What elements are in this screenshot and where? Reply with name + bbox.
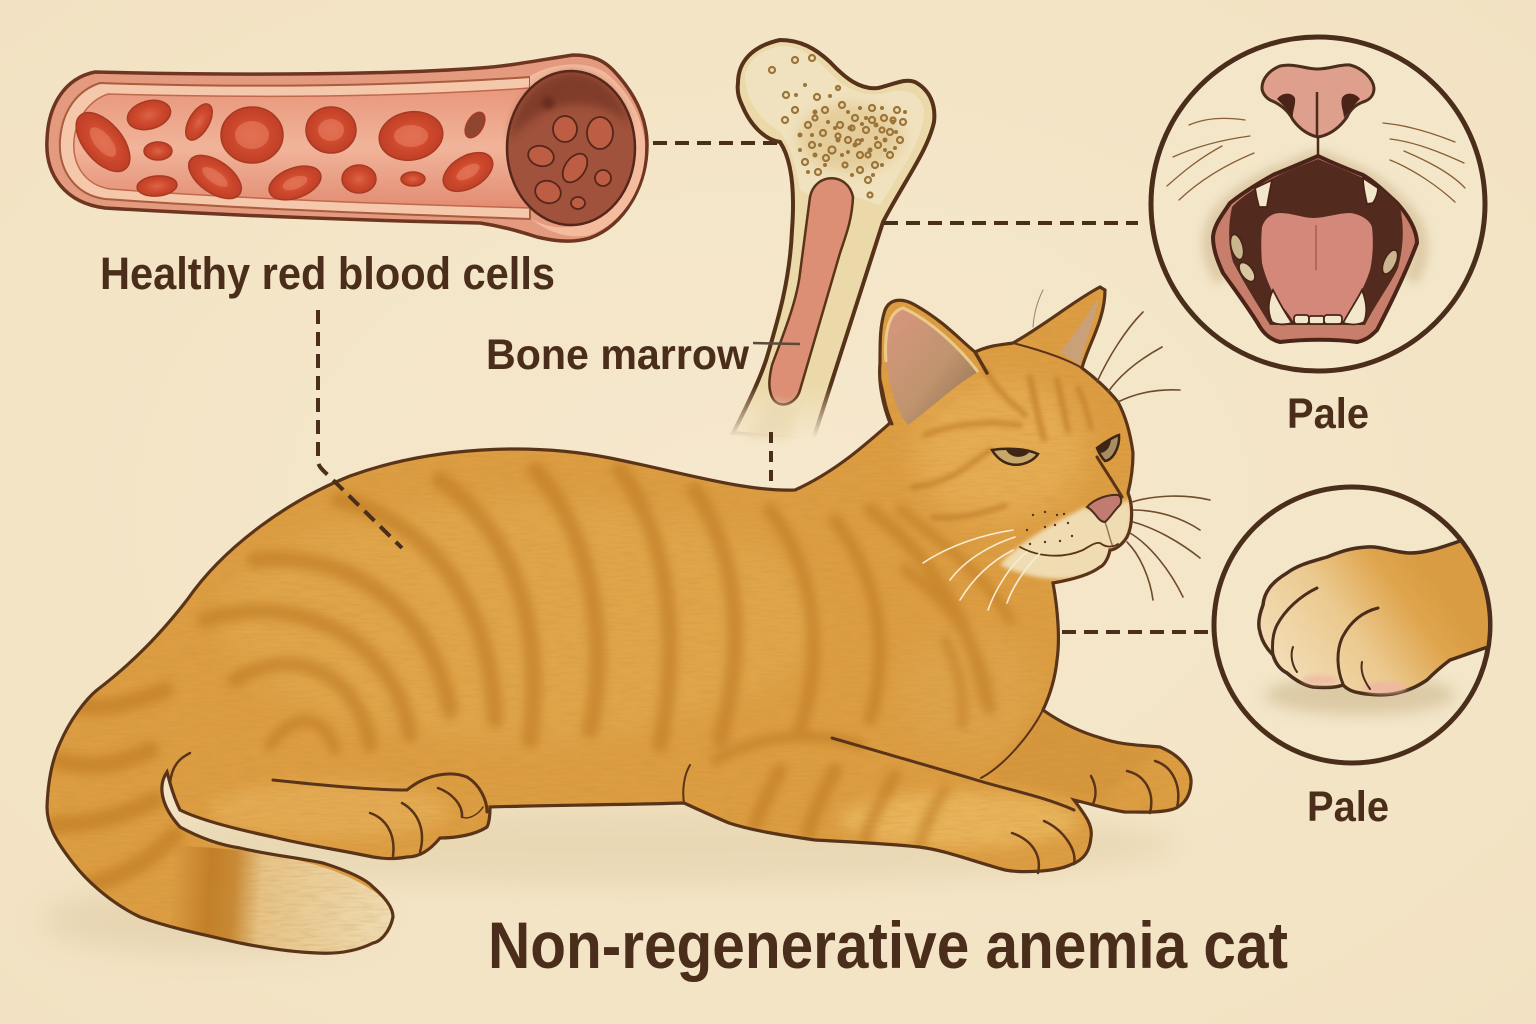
inset: paw circle — [1214, 487, 1500, 763]
cat outline — [47, 287, 1191, 953]
head markings — [913, 370, 1091, 518]
stripes — [55, 470, 1010, 885]
fur shading — [1210, 156, 1318, 280]
cat body — [30, 280, 1210, 970]
cat inner contour lines — [170, 343, 1178, 873]
label: pale mouth: Pale — [1287, 390, 1369, 438]
paw shadow — [1265, 675, 1455, 715]
label: pale paw: Pale — [1307, 783, 1389, 831]
paw — [1259, 530, 1500, 695]
toe lines — [1272, 588, 1378, 689]
lower left canine — [1269, 290, 1292, 324]
label: healthy red blood cells: Healthy red blood cells — [100, 248, 555, 299]
teeth — [1228, 178, 1401, 324]
leader: bone marrow — [753, 343, 800, 344]
upper left canine — [1255, 180, 1272, 207]
bone marrow — [769, 178, 853, 404]
cat whiskers — [923, 290, 1210, 610]
open mouth — [1213, 156, 1417, 342]
illustration: blood vessel with red blood cells — [47, 55, 647, 241]
incisors — [1294, 315, 1309, 324]
whisker dots — [1026, 511, 1073, 545]
fur lines — [1167, 118, 1465, 202]
connector: bone to mouth — [884, 221, 1138, 225]
cat nose — [1087, 495, 1121, 522]
cat eyes — [992, 435, 1119, 465]
red blood cells — [66, 96, 499, 207]
far front leg shading — [985, 710, 1160, 800]
nose — [1262, 65, 1374, 137]
face lines — [1097, 457, 1122, 497]
upper right canine — [1363, 178, 1378, 204]
muzzle — [1000, 500, 1132, 579]
lower right canine — [1343, 290, 1366, 324]
side teeth — [1229, 234, 1244, 260]
tail tip — [170, 845, 395, 956]
connector: vessel to bone — [653, 141, 778, 145]
illustration: bone with marrow — [733, 40, 934, 440]
spongy bone — [745, 46, 924, 205]
title: Non-regenerative anemia cat — [488, 908, 1288, 982]
bone end fade — [745, 392, 802, 440]
tongue — [1261, 213, 1373, 323]
label: bone marrow: Bone marrow — [486, 331, 750, 379]
fur texture — [173, 346, 1167, 952]
inset: mouth circle — [1151, 37, 1485, 371]
connector: cat to paw — [1062, 630, 1212, 634]
illustration: cat — [30, 280, 1210, 970]
vessel opening — [507, 64, 645, 236]
connector: vessel label to cat — [318, 310, 402, 548]
connector: bone to cat — [769, 432, 773, 490]
inner ear — [886, 308, 978, 425]
paw pink — [1363, 682, 1407, 694]
cat shadow — [40, 803, 1180, 955]
